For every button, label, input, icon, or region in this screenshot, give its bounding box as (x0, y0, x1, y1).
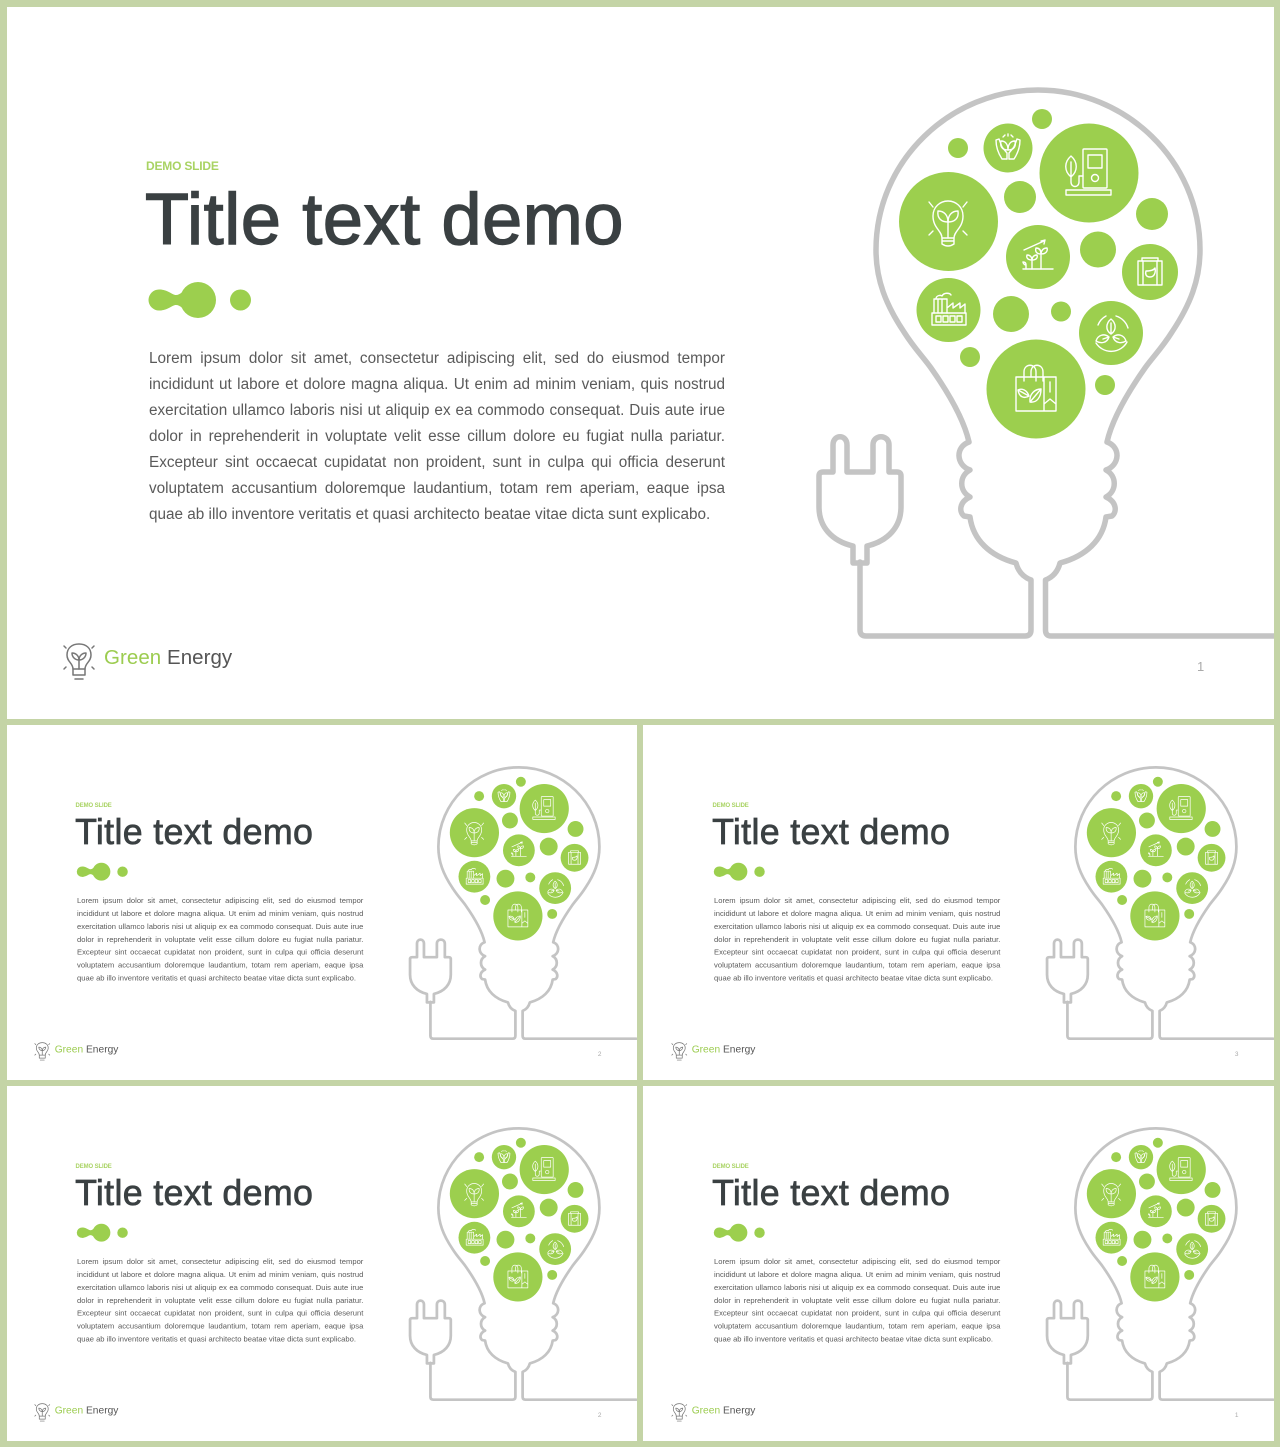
body paragraph: incididunt ut labore et dolore magna aliqua. Ut enim ad minim veniam, quis nostrud (77, 1270, 363, 1279)
decorative blob icon (148, 282, 251, 318)
body paragraph: quae ab illo inventore veritatis et quasi architecto beatae vitae dicta sunt explicabo. (149, 506, 710, 523)
brand name: Green Energy (692, 1405, 755, 1416)
title: Title text demo (75, 1173, 313, 1213)
body paragraph (77, 896, 364, 983)
bulb and plug outline (819, 90, 1274, 636)
icon: recycled bag box (1138, 258, 1162, 285)
body paragraph: incididunt ut labore et dolore magna aliqua. Ut enim ad minim veniam, quis nostrud (149, 376, 725, 393)
body paragraph: exercitation ullamco laboris nisi ut aliquip ex ea commodo consequat. Duis aute irue (77, 922, 363, 931)
body paragraph: Excepteur sint occaecat cupidatat non proident, sunt in culpa qui officia deserunt (77, 1309, 363, 1318)
bulb outline with cord (860, 90, 1274, 636)
white line icons (929, 134, 1162, 411)
slide artwork (34, 766, 637, 1060)
title: Title text demo (75, 812, 313, 852)
eyebrow label: DEMO SLIDE (76, 802, 112, 809)
body paragraph (149, 350, 725, 523)
body paragraph: dolor in reprehenderit in voluptate velit esse cillum dolore eu fugiat nulla pariatur. (77, 935, 363, 944)
body paragraph: Excepteur sint occaecat cupidatat non proident, sunt in culpa qui officia deserunt (149, 454, 725, 471)
slide 2: small panel top left (7, 725, 637, 1080)
brand name: Green Energy (55, 1405, 118, 1416)
plug outline (819, 437, 901, 563)
eyebrow label: DEMO SLIDE (713, 1163, 749, 1170)
slide 5: small panel bottom right (643, 1086, 1274, 1441)
body paragraph: voluptatem accusantium doloremque laudantium, totam rem aperiam, eaque ipsa (149, 480, 725, 497)
body paragraph (77, 1257, 364, 1344)
body paragraph (714, 896, 1000, 983)
body paragraph: exercitation ullamco laboris nisi ut aliquip ex ea commodo consequat. Duis aute irue (77, 1283, 363, 1292)
body paragraph: Excepteur sint occaecat cupidatat non proident, sunt in culpa qui officia deserunt (714, 948, 1000, 957)
page number: 2 (598, 1411, 602, 1419)
page number: 2 (598, 1050, 602, 1058)
body paragraph: Lorem ipsum dolor sit amet, consectetur adipiscing elit, sed do eiusmod tempor (77, 896, 363, 905)
body paragraph: voluptatem accusantium doloremque laudantium, totam rem aperiam, eaque ipsa (77, 1322, 363, 1331)
brand name: Green Energy (55, 1044, 118, 1055)
body paragraph: voluptatem accusantium doloremque laudantium, totam rem aperiam, eaque ipsa (714, 961, 1000, 970)
body paragraph: voluptatem accusantium doloremque laudantium, totam rem aperiam, eaque ipsa (714, 1322, 1000, 1331)
body paragraph: Lorem ipsum dolor sit amet, consectetur adipiscing elit, sed do eiusmod tempor (77, 1257, 363, 1266)
page number: 3 (1235, 1050, 1239, 1058)
icon: three leaves cycle (1096, 316, 1128, 351)
slide artwork (34, 1127, 637, 1422)
body paragraph (714, 1257, 1000, 1344)
body paragraph: Lorem ipsum dolor sit amet, consectetur adipiscing elit, sed do eiusmod tempor (714, 896, 1000, 905)
slide artwork (672, 766, 1274, 1060)
body paragraph: Excepteur sint occaecat cupidatat non proident, sunt in culpa qui officia deserunt (77, 948, 363, 957)
body paragraph: exercitation ullamco laboris nisi ut aliquip ex ea commodo consequat. Duis aute irue (149, 402, 725, 419)
body paragraph: dolor in reprehenderit in voluptate velit esse cillum dolore eu fugiat nulla pariatur. (149, 428, 725, 445)
body paragraph: dolor in reprehenderit in voluptate velit esse cillum dolore eu fugiat nulla pariatur. (714, 1296, 1000, 1305)
title: Title text demo (712, 812, 950, 852)
body paragraph: incididunt ut labore et dolore magna aliqua. Ut enim ad minim veniam, quis nostrud (77, 909, 363, 918)
body paragraph: Excepteur sint occaecat cupidatat non proident, sunt in culpa qui officia deserunt (714, 1309, 1000, 1318)
body paragraph: quae ab illo inventore veritatis et quasi architecto beatae vitae dicta sunt explicabo. (714, 1335, 993, 1344)
body paragraph: incididunt ut labore et dolore magna aliqua. Ut enim ad minim veniam, quis nostrud (714, 1270, 1000, 1279)
body paragraph: quae ab illo inventore veritatis et quasi architecto beatae vitae dicta sunt explicabo. (77, 1335, 356, 1344)
body paragraph: Lorem ipsum dolor sit amet, consectetur adipiscing elit, sed do eiusmod tempor (149, 350, 725, 366)
body paragraph: exercitation ullamco laboris nisi ut aliquip ex ea commodo consequat. Duis aute irue (714, 1283, 1000, 1292)
eyebrow label: DEMO SLIDE (713, 802, 749, 809)
body paragraph: exercitation ullamco laboris nisi ut aliquip ex ea commodo consequat. Duis aute irue (714, 922, 1000, 931)
body paragraph: voluptatem accusantium doloremque laudantium, totam rem aperiam, eaque ipsa (77, 961, 363, 970)
title: Title text demo (145, 180, 624, 260)
icon: fuel pump with leaf (1066, 149, 1111, 195)
body paragraph: dolor in reprehenderit in voluptate velit esse cillum dolore eu fugiat nulla pariatur. (77, 1296, 363, 1305)
slide artwork (672, 1127, 1274, 1422)
slide 3: small panel top right (643, 725, 1274, 1080)
page number: 1 (1197, 659, 1204, 674)
icon: hands holding leaf (996, 134, 1020, 159)
brand name: Green Energy (104, 646, 232, 669)
icon: eco shopping bag (1016, 365, 1056, 411)
icon: factory (932, 293, 966, 325)
icon: growing plants chart (1023, 240, 1053, 269)
body paragraph: dolor in reprehenderit in voluptate velit esse cillum dolore eu fugiat nulla pariatur. (714, 935, 1000, 944)
body paragraph: quae ab illo inventore veritatis et quasi architecto beatae vitae dicta sunt explicabo. (77, 974, 356, 983)
eyebrow label: DEMO SLIDE (76, 1163, 112, 1170)
eyebrow label: DEMO SLIDE (146, 159, 219, 173)
slide artwork (63, 87, 1274, 680)
green circles (899, 109, 1178, 438)
icon: brand bulb logo (64, 644, 94, 679)
body paragraph: Lorem ipsum dolor sit amet, consectetur adipiscing elit, sed do eiusmod tempor (714, 1257, 1000, 1266)
title: Title text demo (712, 1173, 950, 1213)
body paragraph: incididunt ut labore et dolore magna aliqua. Ut enim ad minim veniam, quis nostrud (714, 909, 1000, 918)
body paragraph: quae ab illo inventore veritatis et quasi architecto beatae vitae dicta sunt explicabo. (714, 974, 993, 983)
slide 4: small panel bottom left (7, 1086, 637, 1441)
slide 1: large panel (7, 7, 1274, 719)
page number: 1 (1235, 1411, 1239, 1419)
brand name: Green Energy (692, 1044, 755, 1055)
icon: leaf light bulb (929, 201, 967, 246)
